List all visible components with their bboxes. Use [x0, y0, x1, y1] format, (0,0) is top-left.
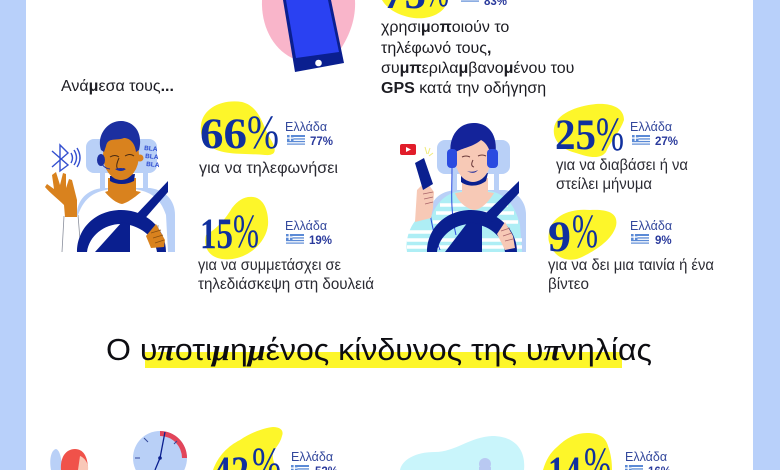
stat: 15 percent teleconference: 19% — [309, 235, 332, 247]
text: phone use while driving: χρησιμοποιούν το — [381, 19, 509, 36]
stat: 25 percent read or send message: 25 — [555, 112, 596, 159]
illustration: sleeping person — [50, 449, 88, 470]
speech: bla bla bla: BLA — [144, 145, 158, 153]
stat: 25 percent read or send message — [554, 104, 678, 161]
text: to watch a film or video — [548, 257, 714, 293]
stat: 25 percent read or send message: 27% — [655, 136, 678, 148]
stat: 14 percent: Ελλάδα — [625, 450, 667, 464]
stat: 14 percent — [543, 433, 671, 470]
stat: 66 percent calls: % — [247, 106, 279, 159]
icon: bluetooth signal — [52, 145, 80, 171]
stat: 15 percent teleconference — [200, 197, 332, 259]
icon: phone on pink circle — [262, 0, 355, 72]
stat: 9 percent watch video — [548, 205, 672, 261]
icon: clock with red zone — [133, 431, 187, 470]
speech: bla bla bla: BLA — [146, 161, 160, 169]
text: to join a work teleconference: τηλεδιάσκεψη στη δουλειά — [198, 276, 374, 293]
stat: 15 percent teleconference: % — [233, 205, 259, 258]
stat: 75 percent using phone — [382, 0, 507, 18]
text: to join a work teleconference: για να συμμετάσχει σε — [198, 257, 341, 274]
stat: 9 percent watch video: 9 — [548, 214, 571, 261]
illustration: cyan blob with figure — [400, 436, 524, 470]
stat: 66 percent calls: 77% — [310, 136, 333, 148]
text: to read or send a message: στείλει μήνυμα — [556, 176, 652, 193]
stat: 15 percent teleconference: 15 — [200, 211, 233, 258]
stat: 25 percent read or send message: % — [596, 108, 624, 161]
title: underestimated risk of drowsiness: Ο υποτιμημένος κίνδυνος της υ πνηλίας — [106, 332, 652, 367]
text: to read or send a message — [556, 157, 688, 193]
speech: bla bla bla — [144, 145, 160, 169]
text: to watch a film or video: βίντεο — [548, 276, 589, 293]
text: to read or send a message: για να διαβάσει ή να — [556, 157, 688, 174]
text: to make a call: για να τηλεφωνήσει — [199, 160, 338, 177]
text: phone use while driving: τηλέφωνό τους, — [381, 40, 491, 57]
text: phone use while driving — [381, 19, 574, 97]
text: to join a work teleconference — [198, 257, 374, 293]
text: to watch a film or video: για να δει μια ταινία ή ένα — [548, 257, 714, 274]
stat: 66 percent calls — [200, 101, 333, 159]
left side band — [0, 0, 26, 470]
speech: bla bla bla: BLA — [145, 153, 159, 161]
subheading: among them: Ανάμεσα τους... — [61, 78, 174, 95]
stat: 9 percent watch video: Ελλάδα — [630, 219, 672, 233]
text: phone use while driving: συμπεριλαμβανομένου του — [381, 60, 574, 77]
right side band — [753, 0, 780, 470]
stat: 42 percent: Ελλάδα — [291, 450, 333, 464]
text: phone use while driving: GPS κατά την οδήγηση — [381, 80, 546, 97]
illustration: driver on hands-free call — [45, 121, 175, 252]
icon: video play badge — [400, 144, 433, 156]
stat: 66 percent calls: 66 — [200, 111, 247, 158]
stat: 15 percent teleconference: Ελλάδα — [285, 219, 327, 233]
stat: 9 percent watch video: % — [572, 205, 598, 258]
stat: 66 percent calls: Ελλάδα — [285, 120, 327, 134]
stat: 25 percent read or send message: Ελλάδα — [630, 120, 672, 134]
illustration: driver with headphones and phone — [407, 123, 526, 252]
stat: 9 percent watch video: 9% — [655, 235, 672, 247]
stat: 42 percent — [213, 427, 338, 470]
